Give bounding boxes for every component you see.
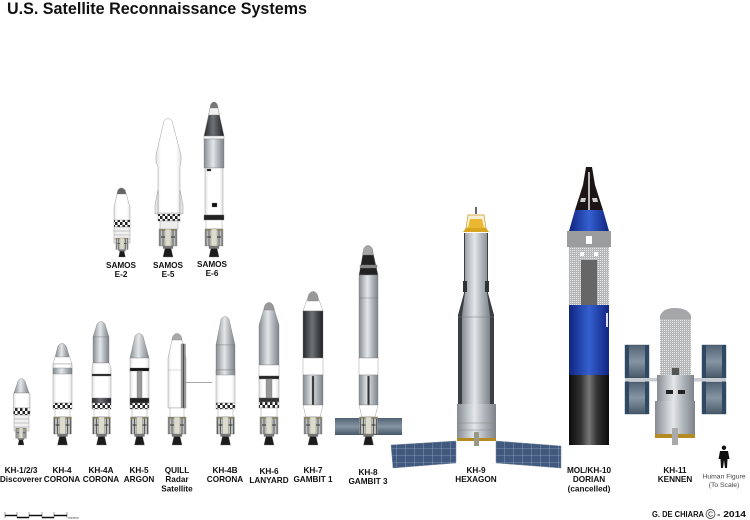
label: QUILL Radar Satellite: QUILL — [165, 466, 189, 475]
rocket: QUILL Radar Satellite — [168, 334, 186, 445]
label: KH-11 Kennen: KH-11 — [663, 466, 687, 475]
label: SAMOS E-2: E-2 — [115, 270, 128, 279]
scale bar: meters — [68, 516, 79, 520]
rocket: KH-7 Gambit 1 — [303, 292, 323, 445]
rocket: MOL/KH-10 Dorian — [567, 167, 611, 445]
label: SAMOS E-2: SAMOS — [106, 261, 136, 270]
label: MOL/KH-10 Dorian: DORIAN — [573, 475, 605, 484]
credit: C — [708, 512, 713, 518]
label: KH-8 Gambit 3: GAMBIT 3 — [348, 477, 388, 486]
label: KH-4 Corona: CORONA — [44, 475, 80, 484]
rocket: KH-4A Corona — [92, 322, 111, 445]
label: KH-9 Hexagon: HEXAGON — [455, 475, 497, 484]
rocket: KH-6 Lanyard — [259, 302, 279, 445]
credit: - 2014 — [717, 510, 747, 519]
label: KH-6 Lanyard: LANYARD — [249, 476, 289, 485]
label: KH-4A Corona: CORONA — [83, 475, 119, 484]
label: MOL/KH-10 Dorian: (cancelled) — [568, 484, 611, 493]
rocket: KH-9 Hexagon — [457, 207, 496, 446]
label: KH-4 Corona: KH-4 — [52, 466, 72, 475]
connector line: QUILL to KH-4B — [186, 382, 212, 384]
rocket: KH-4 Corona — [53, 344, 72, 445]
solar array: KH-11 right — [702, 345, 726, 414]
rocket: SAMOS E-5 — [155, 118, 183, 257]
scale bar — [5, 512, 79, 520]
label: KH-5 Argon: KH-5 — [129, 466, 149, 475]
label: human figure to scale: Human Figure — [702, 474, 746, 480]
label: KH-4B Corona: KH-4B — [212, 466, 238, 475]
label: QUILL Radar Satellite: Radar — [165, 475, 189, 484]
label: KH-4A Corona: KH-4A — [88, 466, 114, 475]
solar array: KH-9 right — [496, 441, 561, 468]
rocket: KH-5 Argon — [130, 334, 149, 445]
label: human figure to scale: (To Scale) — [709, 482, 739, 489]
label: KH-1/2/3 Discoverer: KH-1/2/3 — [5, 466, 37, 475]
title: U.S. Satellite Reconnaissance Systems — [7, 0, 307, 18]
label: SAMOS E-5: E-5 — [162, 270, 175, 279]
label: SAMOS E-6: E-6 — [206, 269, 219, 278]
rocket: KH-8 Gambit 3 — [359, 246, 378, 445]
label: KH-5 Argon: ARGON — [124, 475, 154, 484]
label: KH-11 Kennen: KENNEN — [658, 475, 692, 484]
label: KH-4B Corona: CORONA — [207, 475, 243, 484]
label: KH-1/2/3 Discoverer: Discoverer — [0, 475, 43, 484]
label: KH-7 Gambit 1: GAMBIT 1 — [293, 475, 333, 484]
rocket: SAMOS E-2 — [114, 188, 130, 257]
label: SAMOS E-5: SAMOS — [153, 261, 183, 270]
solar array: KH-8 — [335, 418, 402, 435]
solar array: KH-9 left — [391, 441, 456, 468]
credit: G. DE CHIARA — [652, 510, 704, 519]
label: KH-8 Gambit 3: KH-8 — [358, 468, 378, 477]
rocket: KH-11 Kennen — [625, 308, 726, 445]
label: KH-6 Lanyard: KH-6 — [259, 467, 279, 476]
credit — [652, 510, 747, 519]
rocket: KH-4B Corona — [216, 316, 235, 445]
icon: human figure — [718, 446, 730, 468]
label: QUILL Radar Satellite: Satellite — [161, 484, 193, 493]
label: MOL/KH-10 Dorian: MOL/KH-10 — [567, 466, 611, 475]
rocket: SAMOS E-6 — [204, 102, 224, 257]
label: SAMOS E-6: SAMOS — [197, 260, 227, 269]
rocket: KH-1/2/3 Discoverer — [14, 378, 30, 445]
label: KH-9 Hexagon: KH-9 — [466, 466, 486, 475]
solar array: KH-11 left — [625, 345, 649, 414]
label: KH-7 Gambit 1: KH-7 — [303, 466, 323, 475]
